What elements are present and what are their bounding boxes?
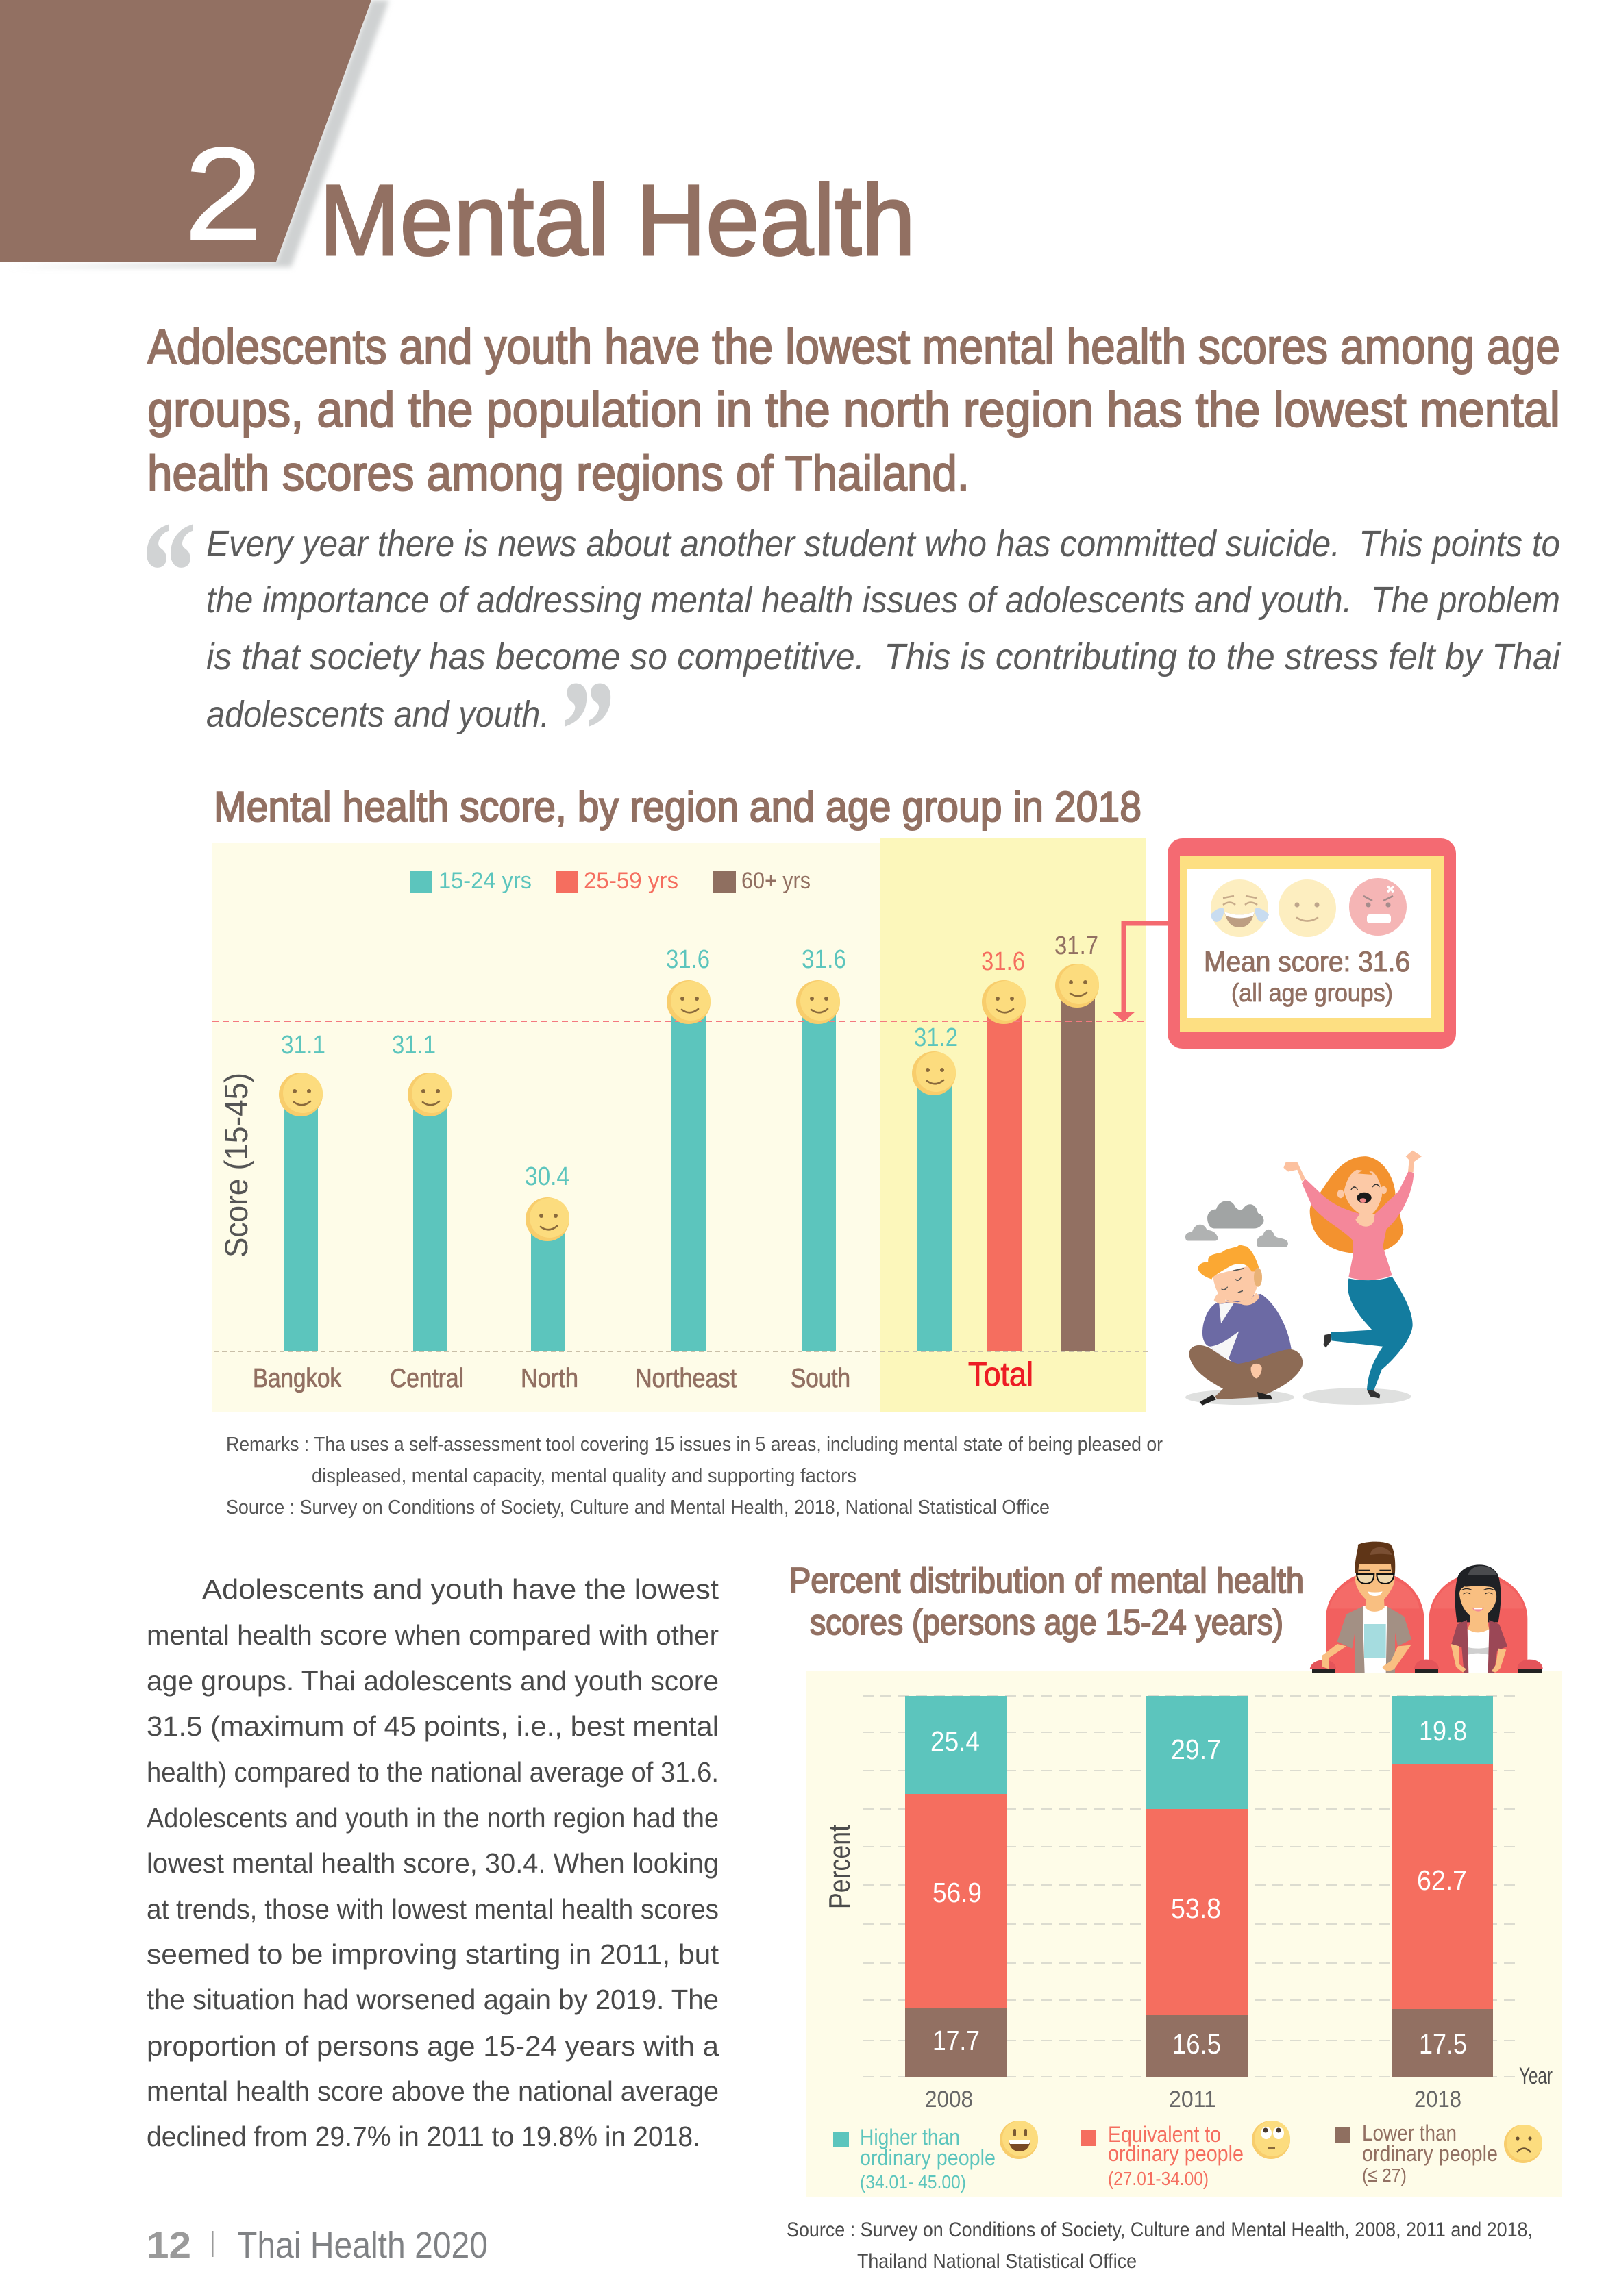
stacked bar: 2018: 19.8: [1419, 1715, 1467, 1747]
value labels: 31.2: [914, 1023, 958, 1052]
legend: lower than ordinary: Lower than: [1362, 2121, 1457, 2145]
title: Mental Health: [319, 164, 915, 277]
stacked bar: 2018: 17.5: [1419, 2028, 1467, 2060]
body text: age groups. Thai adolescents and youth score: [147, 1665, 719, 1697]
source: percent distribution chart: Thailand National Statistical Office: [857, 2250, 1137, 2273]
x axis labels: 2008: [925, 2086, 973, 2112]
category labels: Northeast: [635, 1364, 737, 1393]
glasses: [1357, 1574, 1394, 1584]
body text: Adolescents and youth in the north region had the: [147, 1802, 719, 1834]
value labels: 31.6: [981, 947, 1025, 976]
stacked bar: 2018: [1392, 1696, 1493, 2077]
arrow: mean score to chart: [1112, 923, 1169, 1022]
stacked bar: 2011: 29.7: [1171, 1734, 1221, 1765]
legend: [410, 868, 811, 894]
legend: lower than ordinary: (≤ 27): [1362, 2164, 1407, 2186]
value labels: 31.6: [802, 945, 846, 974]
body text: health) compared to the national average of 31.6.: [147, 1756, 719, 1788]
value labels: 30.4: [525, 1162, 569, 1191]
stacked bar: 2008: [905, 1696, 1007, 2077]
value labels: [281, 932, 1098, 1191]
remarks and source: regional chart: Source : Survey on Conditions of Society, Culture and Mental Health, 2018, National Statistical Office: [226, 1497, 1050, 1519]
callout: mean score: (all age groups): [1231, 979, 1393, 1007]
quote: [136, 492, 1562, 810]
body text: lowest mental health score, 30.4. When looking: [147, 1847, 719, 1879]
category labels: North: [521, 1364, 578, 1393]
illustration: sad boy and happy girl: [1185, 1151, 1422, 1406]
chart heading: percent distribution: scores (persons age 15-24 years): [810, 1603, 1283, 1643]
category labels: South: [791, 1364, 850, 1393]
legend: 60+ yrs: [741, 868, 811, 894]
category labels: [253, 1356, 1033, 1393]
headline: health scores among regions of Thailand.: [147, 447, 970, 501]
callout: mean score: Mean score: 31.6: [1204, 945, 1410, 977]
body text: declined from 29.7% in 2011 to 19.8% in 2018.: [147, 2121, 700, 2152]
source: percent distribution chart: Source : Survey on Conditions of Society, Culture and Mental Health, 2008, 2011 and 2018,: [787, 2219, 1533, 2241]
stacked bar: 2011: 16.5: [1172, 2028, 1221, 2060]
stacked bar: 2008: 17.7: [933, 2025, 980, 2056]
y axis label: Score (15-45): [218, 1073, 254, 1258]
body text: the situation had worsened again by 2019. The: [147, 1984, 719, 2015]
value labels: 31.6: [666, 945, 710, 974]
body text: [147, 1573, 719, 2152]
boy: [1185, 1245, 1303, 1406]
x axis labels: Year: [1519, 2063, 1553, 2089]
legend: lower than ordinary: [1335, 2121, 1542, 2186]
stacked bar: 2011: 53.8: [1171, 1893, 1221, 1924]
category labels: Central: [390, 1364, 464, 1393]
category labels: Bangkok: [253, 1364, 341, 1393]
body text: mental health score when compared with other: [147, 1619, 719, 1651]
panel: percent distribution chart: [806, 1671, 1562, 2197]
woman: [1451, 1564, 1507, 1673]
man: [1322, 1542, 1411, 1673]
icon: neutral smile face: [1279, 879, 1336, 937]
icon: angry face: [1349, 878, 1407, 936]
legend: higher than ordinary: [833, 2121, 1038, 2193]
icon: eye-roll face: [1252, 2121, 1290, 2159]
y axis label: Percent: [823, 1825, 856, 1909]
icon: grey clouds: [1185, 1201, 1288, 1247]
chart heading: percent distribution: Percent distribution of mental health: [789, 1561, 1304, 1601]
page footer: 12: [147, 2225, 191, 2266]
stacked bar: 2008: 56.9: [933, 1877, 982, 1908]
body text: mental health score above the national average: [147, 2075, 719, 2107]
chart heading: regional: Mental health score, by region and age group in 2018: [214, 784, 1141, 831]
value labels: 31.1: [281, 1031, 325, 1060]
value labels: 31.7: [1054, 932, 1098, 960]
body text: at trends, those with lowest mental health scores: [147, 1893, 719, 1925]
legend: equivalent to ordinary: [1081, 2121, 1290, 2189]
legend: higher than ordinary: Higher than: [860, 2125, 960, 2149]
x axis labels: 2011: [1169, 2086, 1216, 2112]
value labels: 31.1: [392, 1031, 436, 1060]
body text: proportion of persons age 15-24 years with a: [147, 2030, 719, 2062]
legend: equivalent to ordinary: ordinary people: [1108, 2141, 1244, 2166]
remarks and source: regional chart: Remarks : Tha uses a self-assessment tool covering 15 issues in 5 areas, including mental state of being pleased or: [226, 1434, 1163, 1456]
legend: 25-59 yrs: [584, 868, 678, 894]
chapter banner: [0, 0, 389, 267]
quote: is that society has become so competitive. This is contributing to the stress felt by Thai: [206, 636, 1562, 677]
legend: 15-24 yrs: [439, 868, 532, 894]
legend: higher than ordinary: ordinary people: [860, 2145, 996, 2170]
girl: [1283, 1151, 1422, 1405]
x axis labels: [925, 2063, 1553, 2112]
bars: [284, 986, 1095, 1351]
legend: lower than ordinary: ordinary people: [1362, 2141, 1498, 2166]
source: percent distribution chart: [787, 2219, 1533, 2273]
page footer: [147, 2225, 488, 2266]
body text: 31.5 (maximum of 45 points, i.e., best mental: [147, 1710, 719, 1742]
x axis labels: 2018: [1414, 2086, 1461, 2112]
stacked bar: 2018: 62.7: [1417, 1864, 1467, 1896]
callout: mean score: [1168, 838, 1456, 1049]
headline: groups, and the population in the north region has the lowest mental: [147, 383, 1560, 438]
icon: closing quote mark: ”: [554, 651, 613, 810]
illustration: two people in seats: [1310, 1542, 1543, 1673]
chapter number: 2: [184, 120, 262, 267]
headline: [147, 320, 1560, 501]
icon: opening quote mark: “: [136, 492, 194, 651]
smiley markers: [279, 964, 1099, 1241]
legend: equivalent to ordinary: (27.01-34.00): [1108, 2168, 1209, 2189]
remarks and source: regional chart: displeased, mental capacity, mental quality and supporting factors: [312, 1465, 856, 1487]
legend: higher than ordinary: (34.01- 45.00): [860, 2171, 966, 2193]
icon: grin face: [1000, 2121, 1038, 2159]
seats: [1310, 1572, 1543, 1673]
chart heading: percent distribution: [789, 1561, 1304, 1643]
body text: seemed to be improving starting in 2011, but: [147, 1938, 719, 1970]
legend: equivalent to ordinary: Equivalent to: [1108, 2122, 1221, 2147]
category labels: Total: [968, 1356, 1033, 1393]
icon: sad face: [1504, 2125, 1542, 2163]
panel: regional bar chart: [212, 838, 1150, 1412]
stacked bar: 2011: [1146, 1696, 1248, 2077]
body text: Adolescents and youth have the lowest: [202, 1573, 719, 1605]
page footer: Thai Health 2020: [237, 2225, 488, 2266]
remarks and source: regional chart: [226, 1434, 1163, 1519]
quote: adolescents and youth.: [206, 694, 550, 735]
stacked bar: 2008: 25.4: [930, 1725, 980, 1757]
icon: laughing face: [1211, 879, 1269, 937]
